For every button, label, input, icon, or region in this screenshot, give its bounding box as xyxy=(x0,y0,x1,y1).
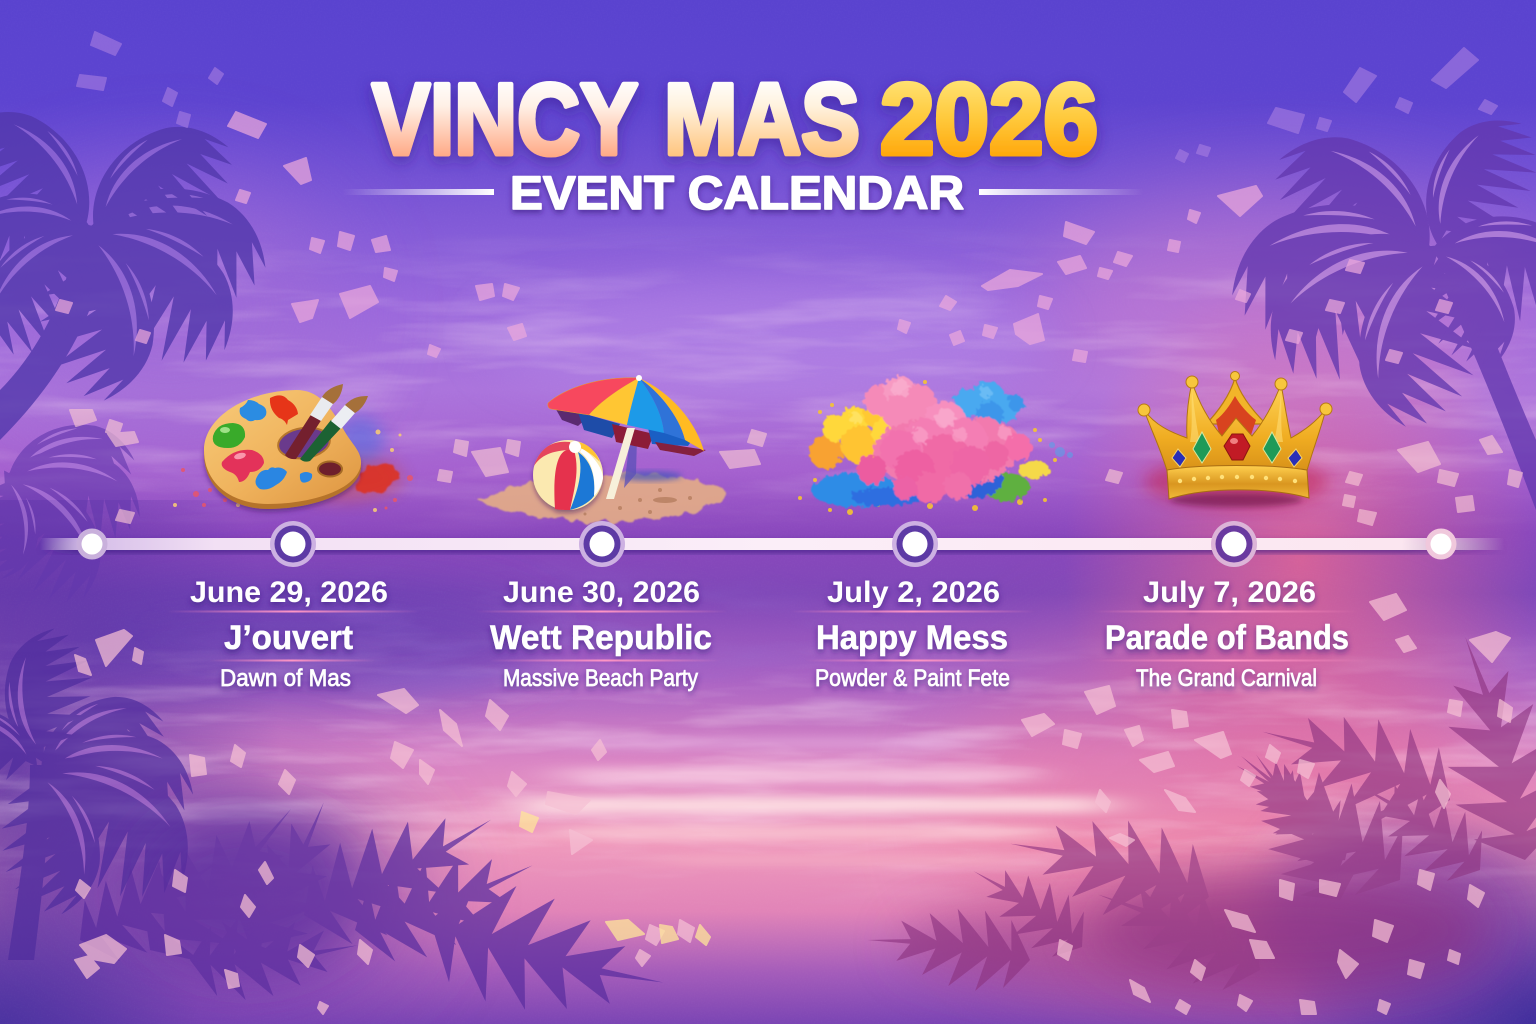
timeline end node: right xyxy=(1426,528,1456,560)
event: Happy Mess: Happy Mess xyxy=(816,619,1008,657)
event: Wett Republic xyxy=(475,576,728,692)
watercolor mottling xyxy=(0,238,1536,879)
confetti: upper lilac xyxy=(77,32,1497,162)
title xyxy=(372,64,1098,176)
timeline node: June 29 xyxy=(270,521,316,567)
event: Parade of Bands: July 7, 2026 xyxy=(1143,576,1316,609)
subtitle with side rules xyxy=(342,166,1144,219)
palm fronds: bottom right foliage xyxy=(863,621,1536,1007)
subtitle with side rules: EVENT CALENDAR xyxy=(510,166,964,219)
palm fronds: bottom left foliage xyxy=(61,777,678,1024)
event: Parade of Bands xyxy=(1090,576,1370,692)
horizon paint streaks xyxy=(520,738,1110,864)
event: J'ouvert xyxy=(166,576,420,692)
timeline node: July 7 xyxy=(1211,521,1257,567)
palm silhouette: top right xyxy=(1228,98,1536,510)
event: Happy Mess: Powder & Paint Fete xyxy=(815,665,1010,692)
event: Parade of Bands: Parade of Bands xyxy=(1105,619,1349,657)
event: J'ouvert: J’ouvert xyxy=(224,619,353,657)
timeline node: July 2 xyxy=(892,521,938,567)
event: J'ouvert: Dawn of Mas xyxy=(220,665,351,692)
palm silhouette: lower left xyxy=(0,626,218,960)
event: Wett Republic: Massive Beach Party xyxy=(503,665,698,692)
timeline node: June 30 xyxy=(579,521,625,567)
icon: colour powder cloud xyxy=(798,376,1073,515)
confetti: gold accents xyxy=(520,812,710,945)
confetti: mid band around icons xyxy=(70,410,1522,525)
title: VINCY xyxy=(372,64,638,176)
event: Wett Republic: June 30, 2026 xyxy=(503,576,700,609)
event: J'ouvert: June 29, 2026 xyxy=(190,576,388,609)
palm silhouette: top left xyxy=(0,83,269,440)
title: 2026 xyxy=(880,64,1098,176)
timeline bar xyxy=(40,538,1504,550)
icon: artist palette xyxy=(173,384,413,512)
timeline end node: left xyxy=(76,528,108,560)
event: Happy Mess xyxy=(790,576,1035,692)
event: Parade of Bands: The Grand Carnival xyxy=(1136,665,1317,692)
icon: beach umbrella and ball on sand xyxy=(478,375,727,520)
event: Wett Republic: Wett Republic xyxy=(490,619,712,657)
icon: gold crown xyxy=(1138,372,1332,507)
palm silhouette: middle left xyxy=(0,410,148,623)
confetti: lower scattered pieces xyxy=(75,594,1512,1014)
confetti: upper pink xyxy=(56,112,1452,363)
event: Happy Mess: July 2, 2026 xyxy=(827,576,1000,609)
title: MAS xyxy=(664,64,860,176)
